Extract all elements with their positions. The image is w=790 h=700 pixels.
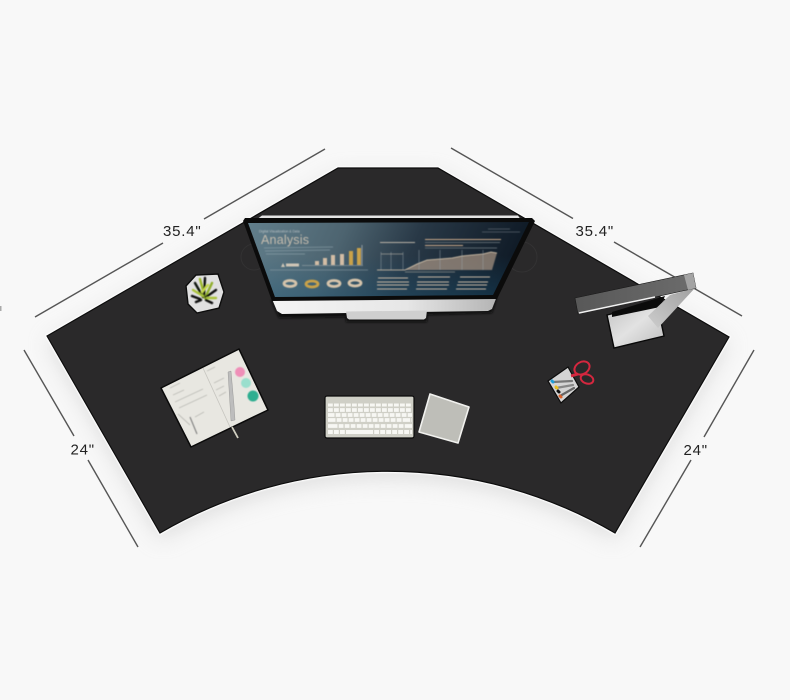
scissors (571, 359, 595, 385)
lamp head end cap (684, 273, 696, 290)
area chart (377, 250, 497, 270)
swatch: teal (248, 390, 258, 402)
notebook pages (161, 349, 268, 447)
cup (548, 367, 579, 403)
lamp arm (648, 288, 695, 328)
monitor shadow (271, 297, 497, 322)
monitor bezel (243, 218, 535, 301)
pen (228, 371, 235, 421)
desk shadow (47, 168, 729, 540)
spine (203, 368, 230, 427)
plant in hexagonal pot (186, 274, 224, 313)
pot (186, 274, 224, 313)
pen cup with scissors (548, 359, 595, 403)
desk lamp (575, 273, 696, 348)
open notebook (161, 349, 268, 447)
lamp head (575, 273, 696, 314)
dimension: back left 35.4 inches: 35.4" (163, 223, 202, 240)
dimension: back right 35.4 inches: 35.4" (576, 223, 614, 240)
screen heading: Digital Visualization & Data (259, 230, 300, 234)
monitor top edge highlight (258, 216, 520, 218)
dimension: back left 35.4 inches (35, 149, 325, 317)
donut charts (284, 280, 361, 287)
header text top right (482, 229, 520, 232)
swatch: light teal (241, 378, 251, 388)
bar chart (302, 245, 363, 266)
keyboard (325, 396, 414, 438)
keyboard body (325, 396, 414, 438)
cable grommets (241, 242, 537, 272)
swatch: pink (235, 367, 245, 377)
dimension: right side 24 inches (640, 350, 754, 547)
dimension: right side 24 inches: 24" (684, 442, 708, 459)
small stat (281, 263, 299, 267)
trackpad (419, 394, 469, 443)
screen title: Analysis (261, 233, 309, 247)
lamp edge highlight (579, 297, 655, 313)
lamp head shadow (612, 296, 665, 317)
monitor chin (272, 296, 497, 314)
desk top (47, 168, 729, 533)
leaves (192, 278, 216, 303)
legend bars (380, 240, 501, 248)
dimension: back right 35.4 inches (451, 148, 742, 316)
intro text lines (264, 247, 333, 254)
ribbon bookmark (232, 427, 238, 438)
screen (248, 222, 529, 297)
lamp base (607, 303, 664, 348)
screen content (259, 229, 520, 289)
key rows (328, 405, 412, 432)
stray mark at left edge (0, 306, 2, 311)
info columns (377, 277, 490, 289)
dimension: left side 24 inches (24, 350, 138, 547)
monitor stand (346, 310, 427, 320)
pens (552, 381, 574, 397)
monitor (241, 216, 537, 322)
dimension: left side 24 inches: 24" (70, 442, 95, 458)
handwritten notes (170, 367, 226, 434)
